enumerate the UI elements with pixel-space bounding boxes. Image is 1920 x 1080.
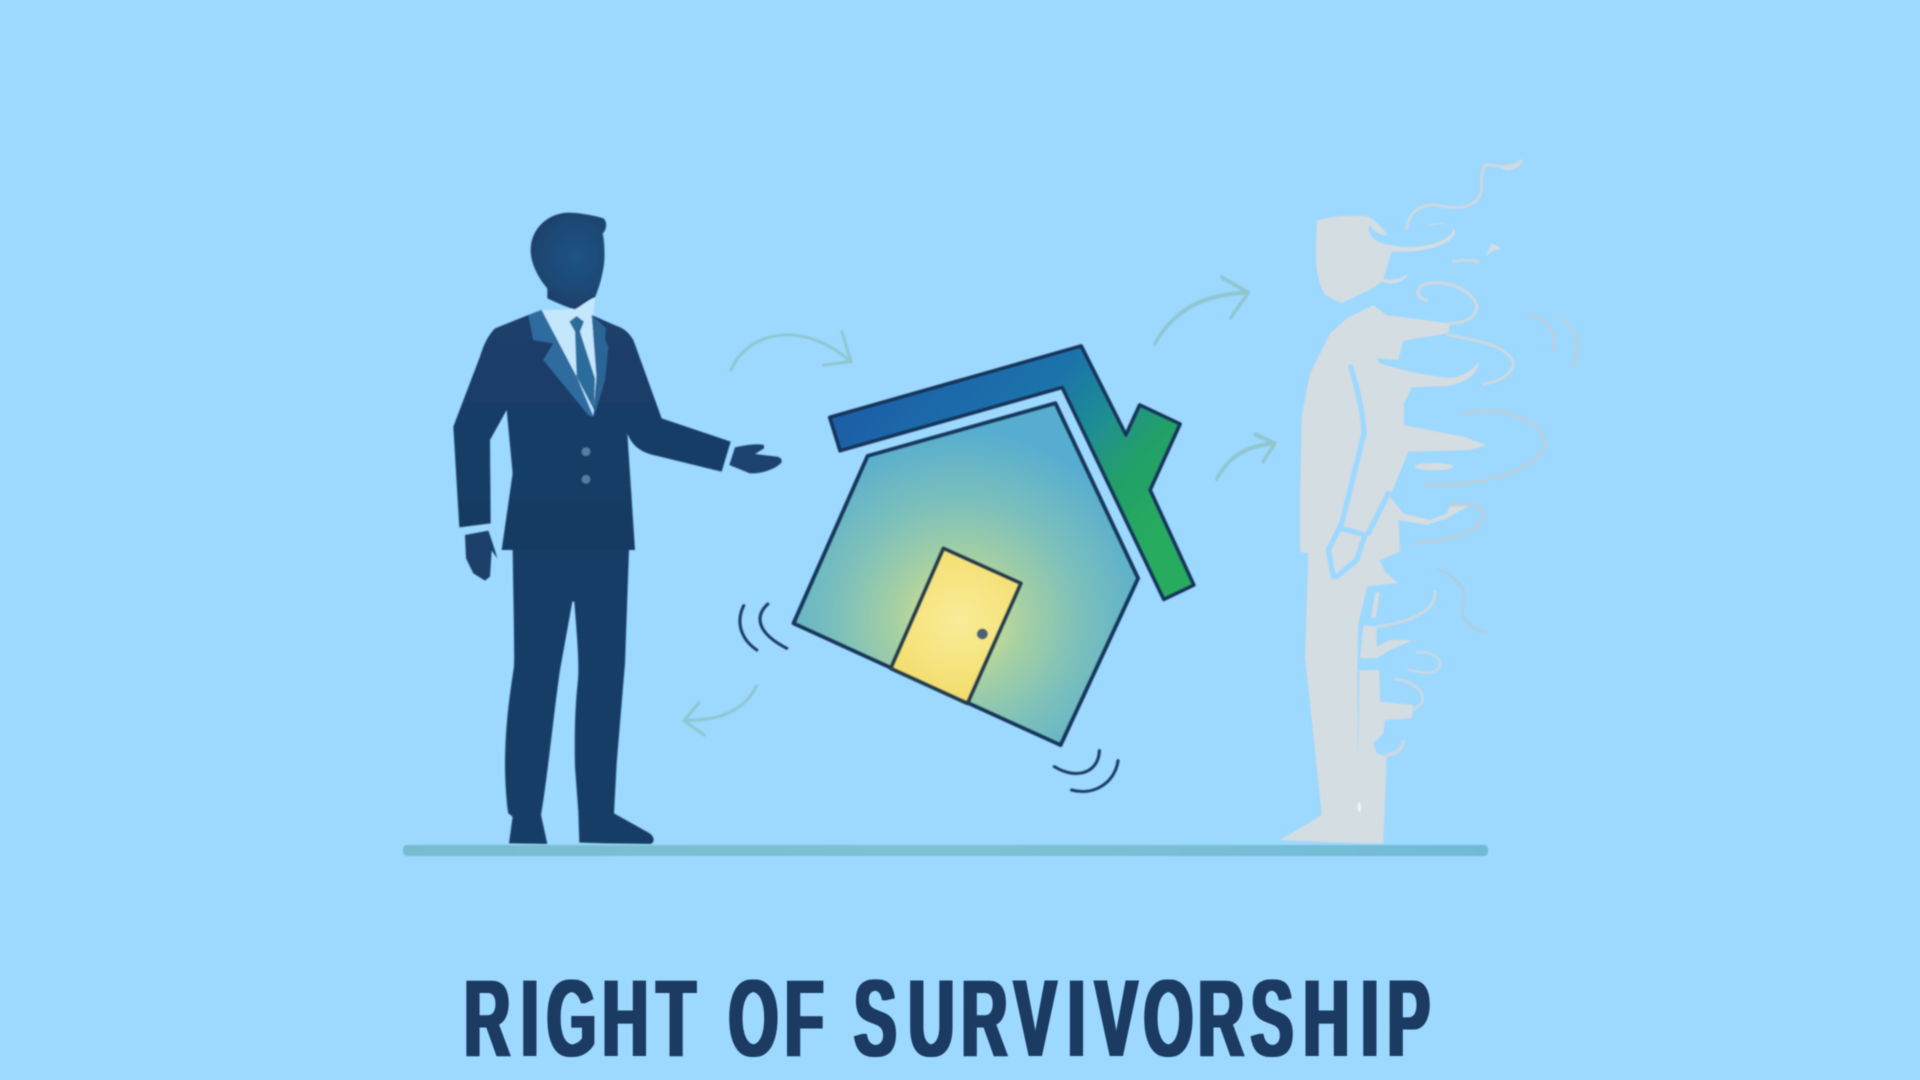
arrow: house back to man [684,686,756,735]
trousers and shoes [505,550,654,844]
motion lines: left corner [740,604,787,650]
dissolving wisps [1377,161,1577,755]
leg cut speck [1358,802,1361,812]
door knob [977,629,988,639]
roof and chimney [830,346,1194,599]
title: RIGHT [464,958,696,1080]
icon: tilted house [740,346,1194,791]
left lapel [528,310,593,417]
shirt [542,297,598,413]
motion lines: bottom corner [1054,751,1118,791]
ground line [403,845,1488,856]
ghost right leg pieces [1357,592,1413,843]
ghost head [1316,216,1455,303]
title [464,958,1430,1080]
arrow: man to house [731,332,851,370]
jacket buttons [582,447,590,484]
left hand [465,531,497,581]
figure: man in suit [453,213,782,844]
tie [569,316,595,410]
ghost torso and left leg [1280,305,1487,843]
title: OF [729,958,824,1080]
wisp blobs [1407,161,1523,470]
right hand [729,444,782,473]
illustration scene [403,161,1577,856]
arrow: upper to ghost [1155,277,1248,343]
arrow: lower to ghost [1217,434,1275,479]
door [891,548,1021,703]
arm and hand cut lines [1328,367,1388,577]
house body [794,403,1138,745]
title: SURVIVORSHIP [854,958,1430,1080]
head [531,213,606,309]
right lapel [592,315,608,417]
figure: fading ghost man [1280,161,1577,843]
jacket [453,310,731,550]
